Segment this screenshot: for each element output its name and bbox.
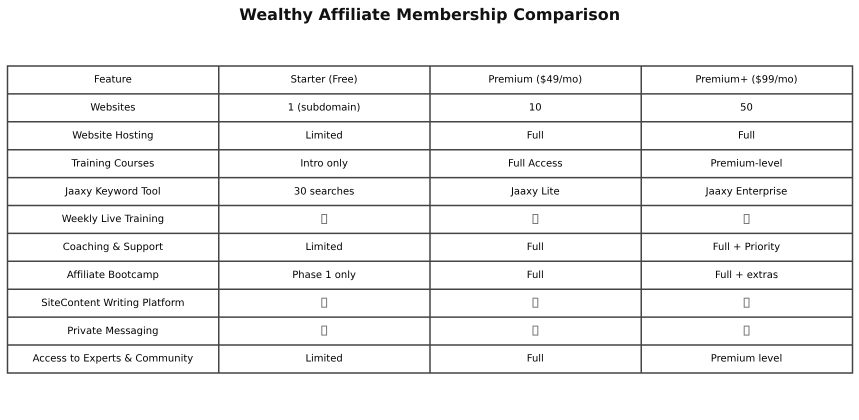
row: affiliate bootcamp	[67, 270, 778, 281]
row: access to experts and community: Access to Experts & Community	[33, 354, 193, 365]
row: website hosting: Full	[527, 130, 544, 142]
header row: Starter (Free)	[291, 75, 358, 86]
header row: Premium ($49/mo)	[488, 75, 582, 86]
row: training courses	[71, 158, 782, 169]
row: training courses: Premium-level	[711, 158, 782, 169]
row: sitecontent writing platform	[41, 298, 749, 309]
row: coaching and support	[63, 242, 780, 253]
row: websites	[90, 103, 753, 114]
row: websites: Websites	[90, 103, 135, 114]
row: website hosting: Full	[738, 130, 755, 142]
row: affiliate bootcamp: Affiliate Bootcamp	[67, 270, 159, 281]
row: jaaxy keyword tool: 30 searches	[294, 186, 354, 197]
row: affiliate bootcamp: Phase 1 only	[292, 270, 356, 281]
title: Wealthy Affiliate Membership Comparison	[239, 5, 620, 24]
row: private messaging: Private Messaging	[67, 326, 158, 337]
row: websites: 1 (subdomain)	[288, 103, 361, 114]
row: sitecontent writing platform: SiteContent Writing Platform	[41, 298, 185, 309]
row: affiliate bootcamp: Full + extras	[715, 270, 778, 281]
row: weekly live training	[62, 214, 749, 225]
row: website hosting	[72, 130, 755, 142]
row: coaching and support: Full	[527, 242, 544, 253]
row: coaching and support: Coaching & Support	[63, 242, 163, 253]
row: websites: 50	[740, 103, 753, 114]
row: training courses: Full Access	[508, 158, 563, 169]
row: jaaxy keyword tool: Jaaxy Lite	[510, 186, 560, 197]
row: jaaxy keyword tool: Jaaxy Enterprise	[705, 186, 787, 197]
row: coaching and support: Full + Priority	[713, 242, 780, 253]
row: weekly live training: Weekly Live Training	[62, 214, 164, 225]
row: access to experts and community: Full	[527, 354, 544, 365]
row: training courses: Training Courses	[71, 158, 154, 169]
header row: Premium+ ($99/mo)	[695, 75, 798, 86]
row: jaaxy keyword tool	[64, 186, 787, 197]
row: access to experts and community	[33, 354, 782, 365]
row: access to experts and community: Limited	[305, 354, 343, 365]
header row	[94, 75, 798, 86]
row: websites: 10	[529, 103, 542, 114]
row: website hosting: Website Hosting	[72, 130, 154, 142]
row: training courses: Intro only	[300, 158, 348, 169]
header row: Feature	[94, 75, 132, 86]
row: affiliate bootcamp: Full	[527, 270, 544, 281]
row: website hosting: Limited	[305, 130, 343, 142]
row: jaaxy keyword tool: Jaaxy Keyword Tool	[64, 186, 161, 197]
row: private messaging	[67, 326, 749, 337]
row: coaching and support: Limited	[305, 242, 343, 253]
row: access to experts and community: Premium level	[711, 354, 782, 365]
comparison table	[8, 66, 852, 373]
